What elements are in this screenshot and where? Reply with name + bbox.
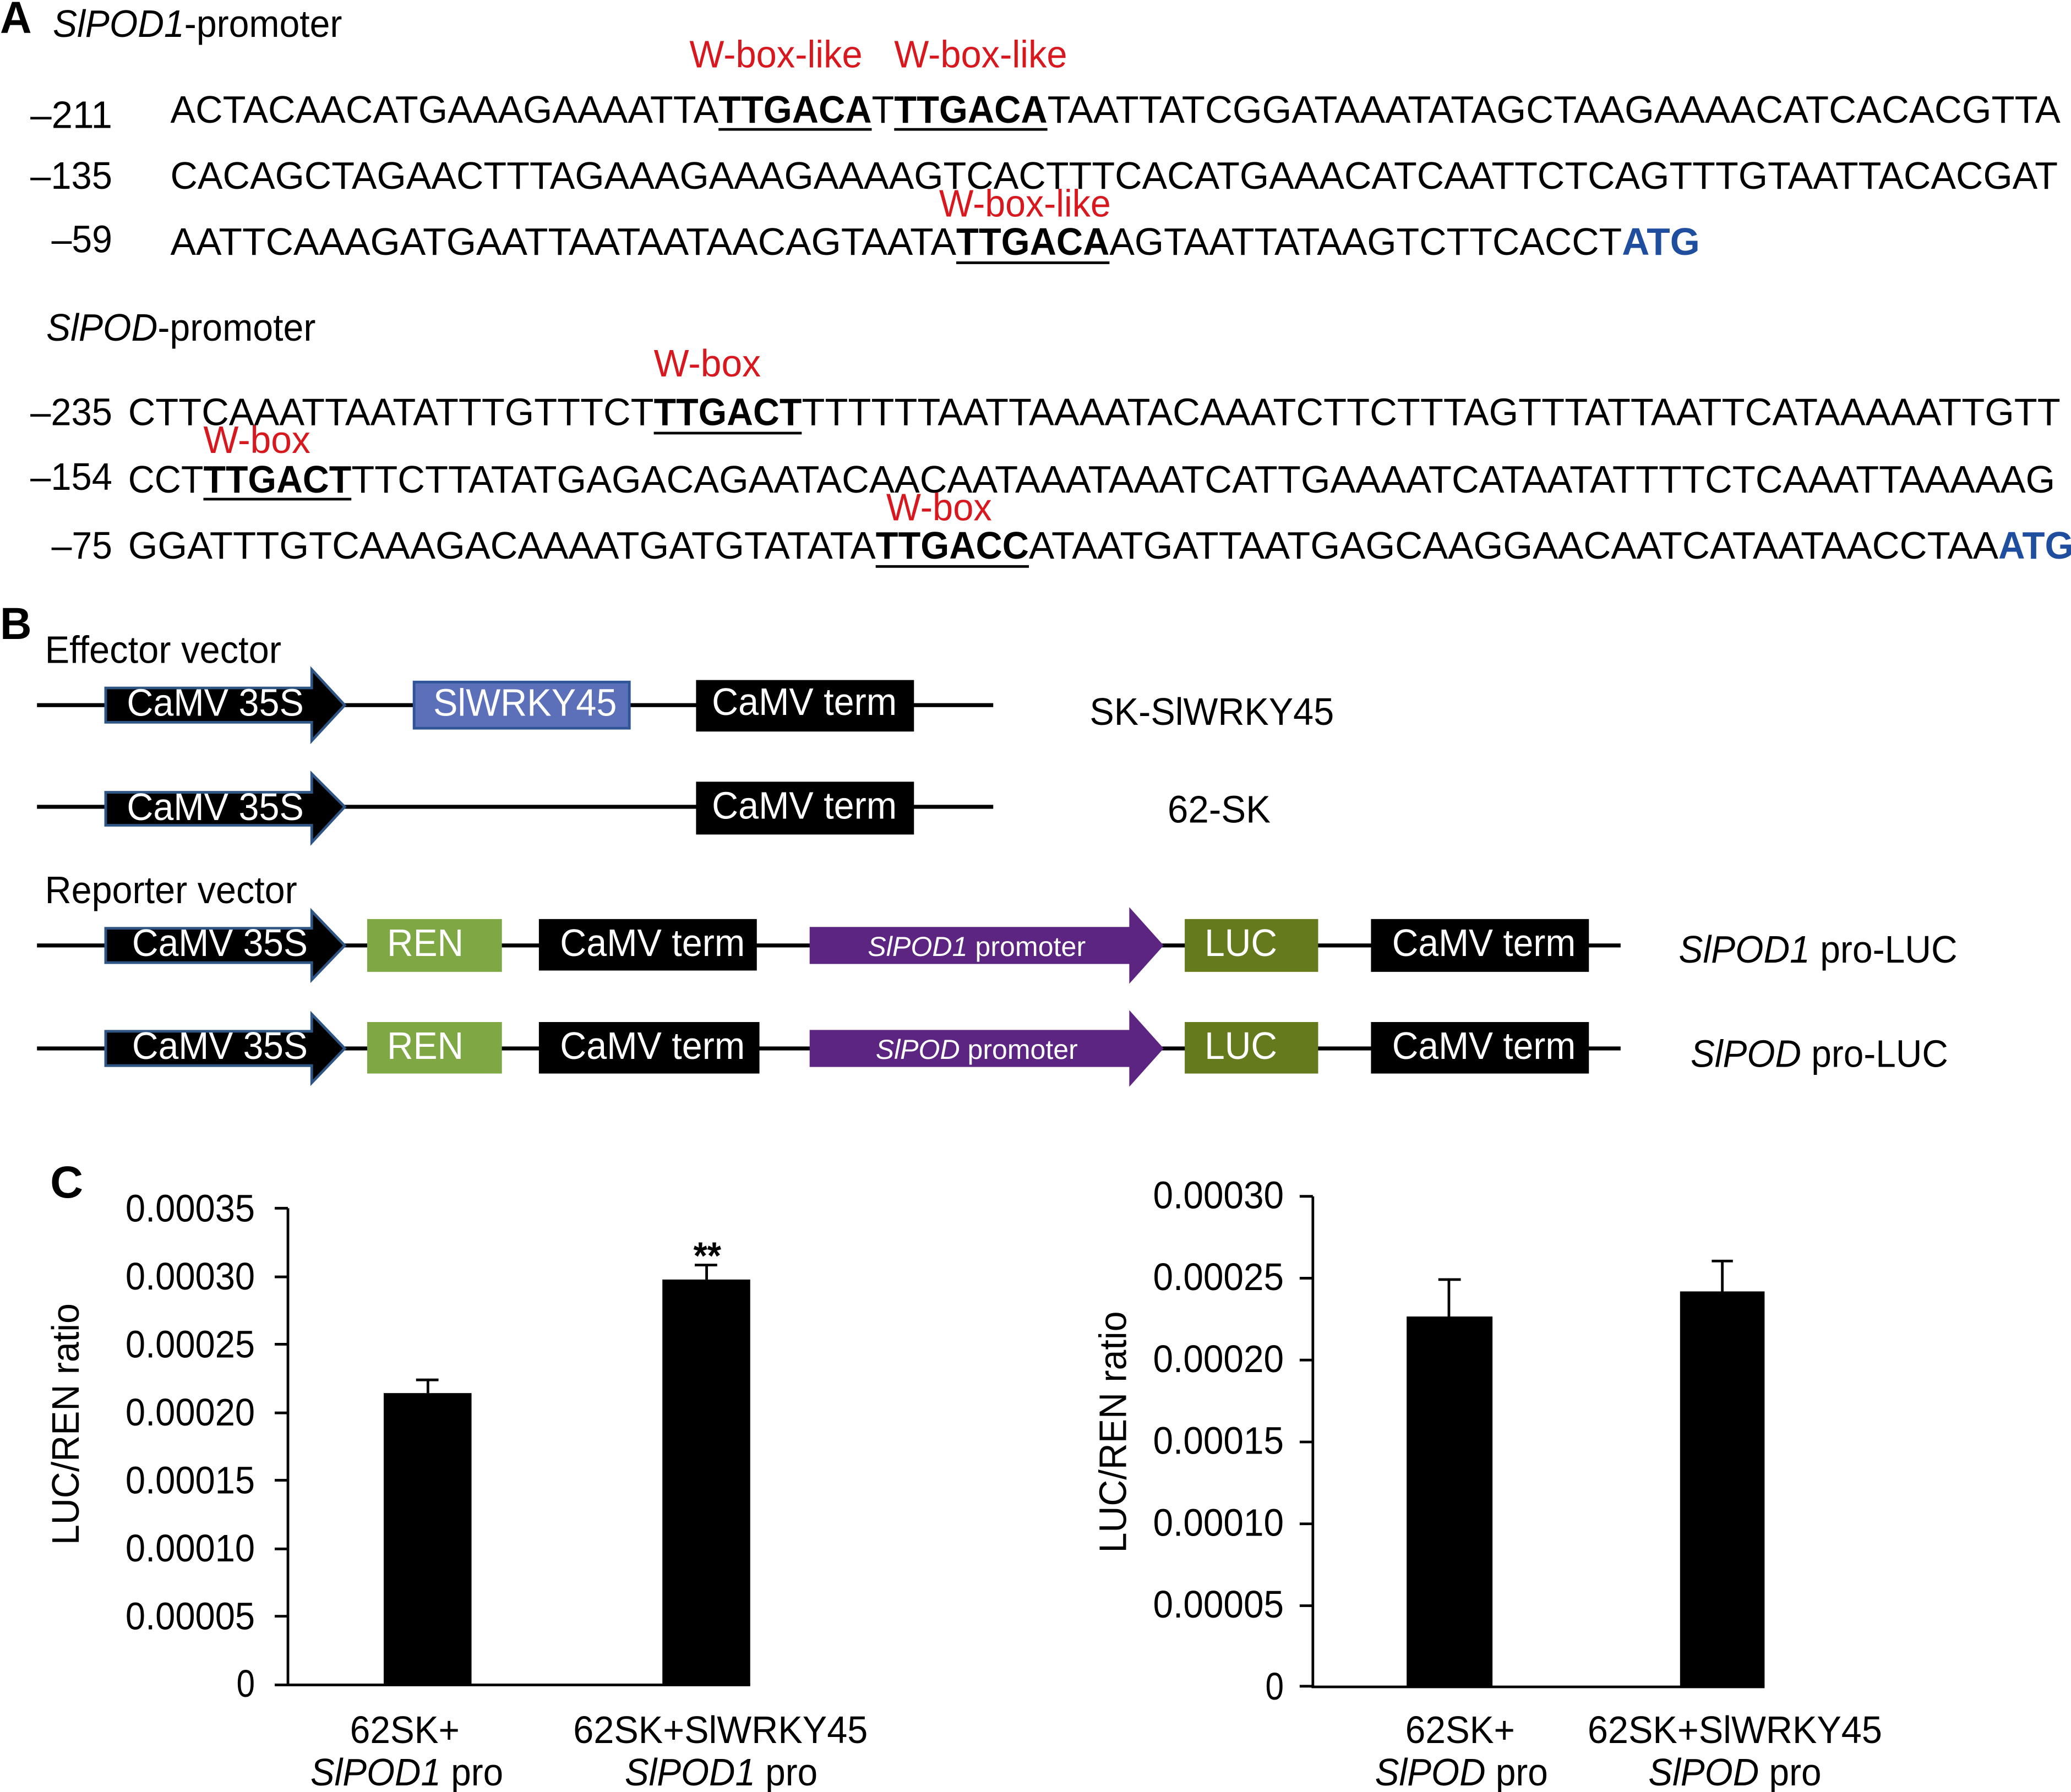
x label 1: 62SK+ <box>1405 1708 1515 1751</box>
label: 62-SK: 62-SK <box>1168 788 1271 831</box>
sequence line -235: –235 <box>30 391 112 434</box>
panel B: vector constructs <box>0 599 1958 1087</box>
x label 1 <box>1375 1708 1548 1792</box>
heading: Reporter vector: Reporter vector <box>45 868 297 911</box>
sequence line -235: CTTCAAATTAATATTTGTTTCT <box>128 391 654 434</box>
sequence line -59: AATTCAAAGATGAATTAATAATAACAGTAATA <box>171 220 957 263</box>
red label: W-box 1: W-box <box>654 342 761 385</box>
sequence line -154: TTCTTATATGAGACAGAATACAACAATAAATAAATCATTGAAAATCATAATATTTTCTCAAATTAAAAAG <box>351 458 2055 501</box>
sequence line -135: –135 <box>30 154 112 197</box>
sequence line -211: TTGACA <box>894 88 1048 131</box>
x label 2: 62SK+SlWRKY45 <box>1588 1708 1882 1751</box>
panel letter C: C <box>50 1157 83 1208</box>
red label: W-box 3: W-box <box>886 485 992 528</box>
sequence line -211: TTGACA <box>718 88 871 131</box>
construct: SlPOD pro-LUC: SlPOD promoter <box>876 1034 1078 1065</box>
sequence line -75: GGATTTGTCAAAGACAAAATGATGTATATA <box>128 524 876 567</box>
construct: SK-SlWRKY45 <box>37 669 993 741</box>
y tick labels: 0.00010 <box>126 1527 255 1570</box>
label: SlPOD1 pro-LUC: SlPOD1 pro-LUC <box>1678 928 1958 971</box>
y tick labels: 0.00005 <box>1153 1583 1284 1626</box>
sequence line -59: ATG <box>1622 220 1700 263</box>
sequence line -59: AGTAATTATAAGTCTTCACCT <box>1109 220 1622 263</box>
y tick labels: 0.00020 <box>1153 1337 1284 1380</box>
y tick labels: 0.00025 <box>1153 1255 1284 1298</box>
sequence line -154: CCT <box>128 458 203 501</box>
bar: 62SK+ SlPOD1 pro <box>384 1380 472 1685</box>
sequence line -211: ACTACAACATGAAAGAAAATTA <box>171 88 719 131</box>
y axis and ticks <box>1300 1197 1764 1687</box>
sequence line -154: TTGACT <box>203 458 351 501</box>
construct: 62-SK <box>37 774 993 843</box>
construct: SK-SlWRKY45: CaMV term <box>712 680 897 723</box>
heading: SlPOD1-promoter: SlPOD1-promoter <box>53 2 342 45</box>
construct: SlPOD pro-LUC: CaMV 35S <box>132 1024 308 1067</box>
bar chart: SlPOD1 pro <box>44 1187 868 1792</box>
panel A: promoter sequences <box>0 0 2071 568</box>
x label 2 <box>1588 1708 1882 1792</box>
y axis title: LUC/REN ratio <box>44 1303 87 1545</box>
red label: W-box-like 3: W-box-like <box>939 182 1111 225</box>
construct: SlPOD pro-LUC: CaMV term <box>560 1024 745 1067</box>
y tick labels: 0.00020 <box>126 1391 255 1434</box>
x label 2 <box>573 1708 868 1792</box>
construct: SlPOD pro-LUC: LUC <box>1205 1024 1277 1067</box>
y tick labels: 0.00010 <box>1153 1501 1284 1544</box>
y tick labels: 0 <box>236 1662 255 1705</box>
construct: SlPOD1 pro-LUC <box>37 907 1621 984</box>
construct: SlPOD1 pro-LUC: CaMV 35S <box>132 921 308 964</box>
construct: SK-SlWRKY45: CaMV 35S <box>127 681 304 724</box>
y tick labels <box>1153 1173 1284 1708</box>
sequence line -75 <box>52 524 2071 568</box>
bar: 62SK+SlWRKY45 SlPOD1 pro <box>662 1265 750 1685</box>
red label: W-box-like 2: W-box-like <box>894 32 1067 75</box>
y tick labels <box>126 1187 255 1705</box>
construct: SK-SlWRKY45: SlWRKY45 <box>433 681 617 724</box>
construct: SlPOD pro-LUC <box>37 1010 1621 1087</box>
significance marker: ** <box>694 1234 721 1277</box>
red label: W-box-like 1: W-box-like <box>689 32 863 75</box>
y axis and ticks <box>275 1208 750 1685</box>
label: SlPOD pro-LUC: SlPOD pro-LUC <box>1691 1032 1948 1075</box>
construct: SlPOD pro-LUC: REN <box>387 1024 464 1067</box>
sequence line -235: TTTTTTAATTAAAATACAAATCTTCTTTAGTTTATTAATTCATAAAAATTGTT <box>802 391 2061 434</box>
sequence line -59: –59 <box>52 217 112 260</box>
sequence line -211: –211 <box>30 94 112 136</box>
heading: SlPOD-promoter: SlPOD-promoter <box>46 306 315 349</box>
sequence line -59: TTGACA <box>956 220 1109 263</box>
heading: Effector vector: Effector vector <box>45 628 281 671</box>
sequence line -135: CACAGCTAGAACTTTAGAAAGAAAGAAAAGTCACTTTCACATGAAACATCAATTCTCAGTTTGTAATTACACGAT <box>171 154 2058 197</box>
y tick labels: 0.00025 <box>126 1323 255 1365</box>
y tick labels: 0.00030 <box>1153 1173 1284 1216</box>
sequence line -75: TTGACC <box>876 524 1029 567</box>
x label 2: 62SK+SlWRKY45 <box>573 1708 868 1751</box>
x label 1 <box>310 1708 503 1792</box>
y axis title: LUC/REN ratio <box>1091 1311 1134 1553</box>
bar: 62SK+ SlPOD pro <box>1407 1280 1492 1686</box>
panel letter B: B <box>0 599 32 649</box>
construct: SlPOD pro-LUC: CaMV term <box>1392 1024 1576 1067</box>
construct: SlPOD1 pro-LUC: LUC <box>1205 921 1277 964</box>
construct: SlPOD1 pro-LUC: REN <box>387 921 464 964</box>
y tick labels: 0.00005 <box>126 1595 255 1638</box>
sequence line -211: TAATTATCGGATAAATATAGCTAAGAAAACATCACACGTTA <box>1048 88 2061 131</box>
construct: 62-SK: CaMV 35S <box>127 785 304 828</box>
construct: SlPOD1 pro-LUC: CaMV term <box>1392 921 1576 964</box>
y tick labels: 0 <box>1265 1665 1284 1708</box>
label: SK-SlWRKY45: SK-SlWRKY45 <box>1089 690 1334 733</box>
bar chart: SlPOD pro <box>1091 1173 1882 1792</box>
sequence line -75: ATAATGATTAATGAGCAAGGAACAATCATAATAACCTAA <box>1029 524 1999 567</box>
sequence line -75: –75 <box>52 524 112 567</box>
construct: SlPOD1 pro-LUC: SlPOD1 promoter <box>868 931 1086 962</box>
sequence line -235: TTGACT <box>654 391 802 434</box>
y tick labels: 0.00015 <box>126 1459 255 1502</box>
x label 1: 62SK+ <box>350 1708 460 1751</box>
sequence line -59 <box>52 217 1700 264</box>
bar: 62SK+SlWRKY45 SlPOD pro <box>1680 1261 1764 1686</box>
sequence line -235 <box>30 391 2061 434</box>
sequence line -211: T <box>871 88 894 131</box>
y tick labels: 0.00015 <box>1153 1419 1284 1462</box>
panel C: bar charts <box>44 1157 1882 1792</box>
y tick labels: 0.00030 <box>126 1255 255 1298</box>
sequence line -211 <box>30 88 2061 136</box>
construct: 62-SK: CaMV term <box>712 784 897 827</box>
y tick labels: 0.00035 <box>126 1187 255 1230</box>
red label: W-box 2: W-box <box>203 418 310 461</box>
construct: SlPOD1 pro-LUC: CaMV term <box>560 921 745 964</box>
sequence line -154: –154 <box>30 455 112 498</box>
